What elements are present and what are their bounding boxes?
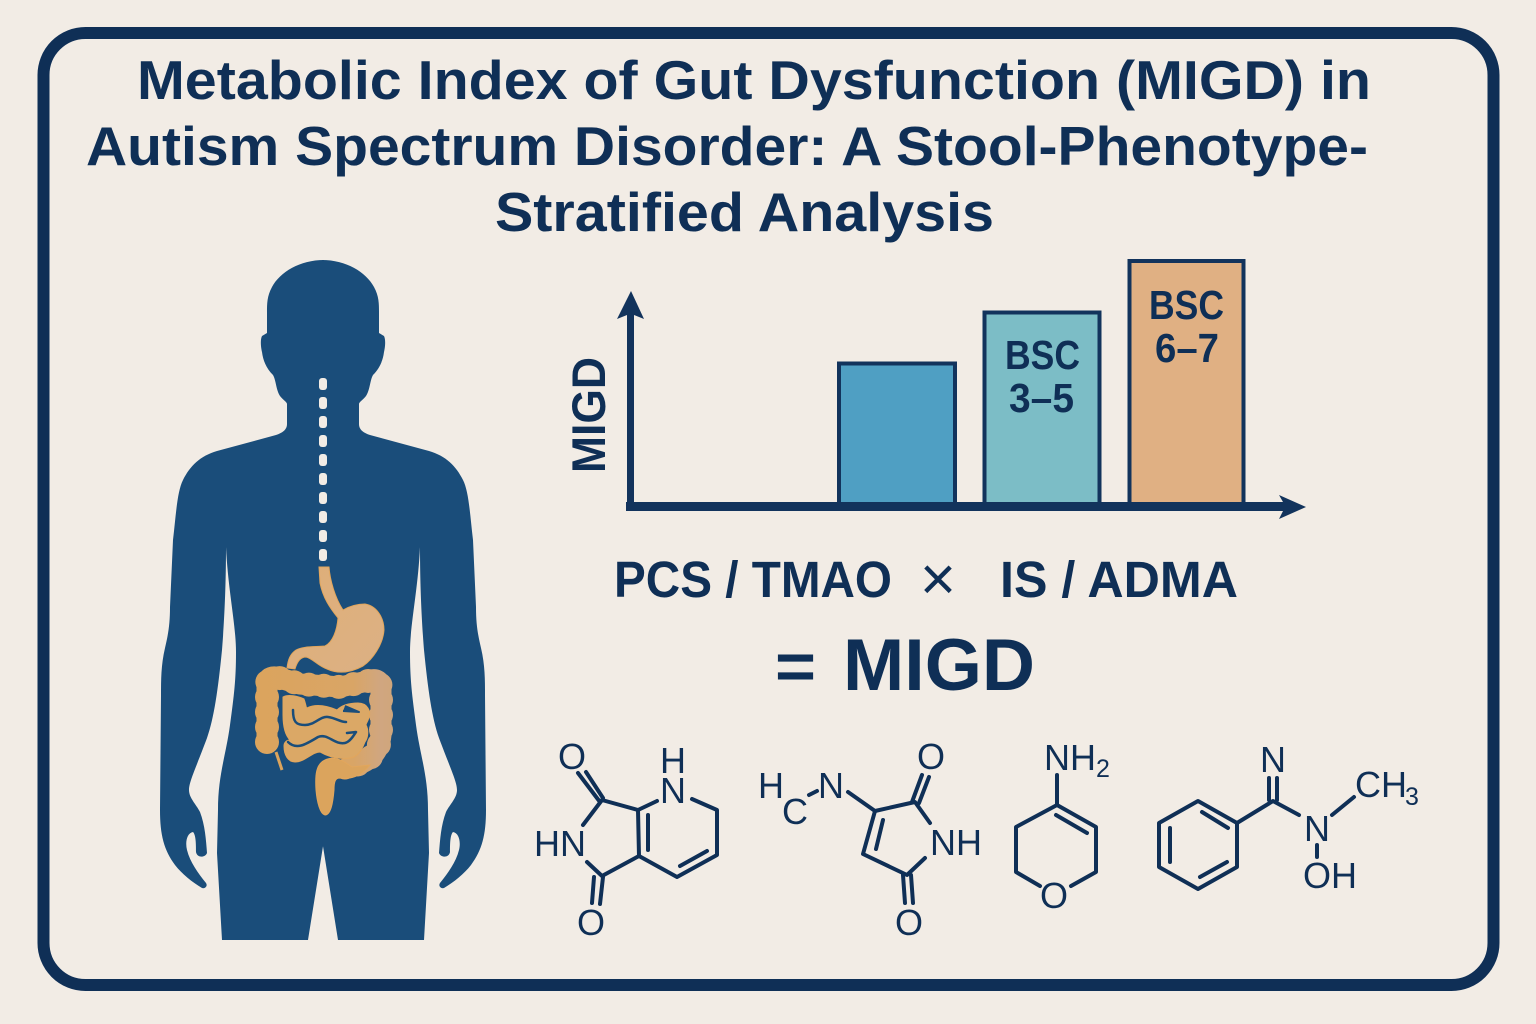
molecule 1: O (558, 736, 586, 777)
bar: BSC 3-5: BSC (1005, 332, 1080, 378)
molecule 1: O (577, 902, 605, 943)
title: Autism Spectrum Disorder: A Stool-Phenotype- (86, 115, 1368, 177)
icon: rectum (316, 758, 370, 815)
icon: esophagus and stomach (287, 567, 384, 672)
molecule 4: N (1260, 739, 1286, 780)
formula: × (920, 545, 956, 614)
molecule 4: N (1304, 808, 1330, 849)
molecule 3: NH (1044, 737, 1096, 778)
molecule 2: C (782, 791, 808, 832)
molecule 4: OH (1303, 855, 1357, 896)
icon: spine dots (319, 378, 327, 561)
x axis arrow (626, 495, 1306, 519)
molecule 2: O (917, 736, 945, 777)
icon: colon (267, 677, 381, 769)
molecule 3 (1016, 737, 1110, 916)
human body illustration (160, 260, 486, 940)
bar: BSC 6-7: BSC (1149, 282, 1224, 328)
icon: appendix (276, 752, 282, 770)
molecule 4: 3 (1405, 783, 1419, 811)
result: = MIGD: = (775, 629, 816, 703)
bar: unlabeled (839, 364, 955, 506)
molecule 4: CH (1355, 764, 1407, 805)
molecule 2: N (818, 765, 844, 806)
icon: small intestine (283, 696, 370, 762)
title (86, 49, 1371, 243)
bar: BSC 3-5: 3–5 (1009, 375, 1074, 421)
title: Metabolic Index of Gut Dysfunction (MIGD) in (137, 49, 1371, 111)
molecule 1: H (660, 740, 686, 781)
molecule 1 (534, 736, 717, 943)
formula: IS / ADMA (1000, 551, 1238, 608)
icon: body silhouette (160, 260, 486, 940)
molecule 2 (758, 736, 982, 943)
bar chart (562, 261, 1306, 519)
title: Stratified Analysis (495, 181, 994, 243)
bar: BSC 6-7 (1130, 261, 1244, 506)
molecule 2: H (758, 765, 784, 806)
molecule 3: O (1040, 875, 1068, 916)
molecule 1: N (660, 770, 686, 811)
bar: BSC 6-7: 6–7 (1155, 325, 1219, 371)
bar: BSC 3-5 (984, 312, 1100, 506)
molecule 2: NH (930, 822, 982, 863)
molecule 4 (1159, 739, 1419, 896)
formula: PCS / TMAO (614, 551, 892, 608)
y axis arrow (617, 291, 644, 510)
y axis label: MIGD (562, 357, 615, 473)
result: = MIGD: MIGD (843, 625, 1035, 706)
formula (614, 545, 1238, 614)
molecule 2: O (895, 902, 923, 943)
molecule 1: HN (534, 823, 586, 864)
molecule 3: 2 (1096, 755, 1110, 783)
